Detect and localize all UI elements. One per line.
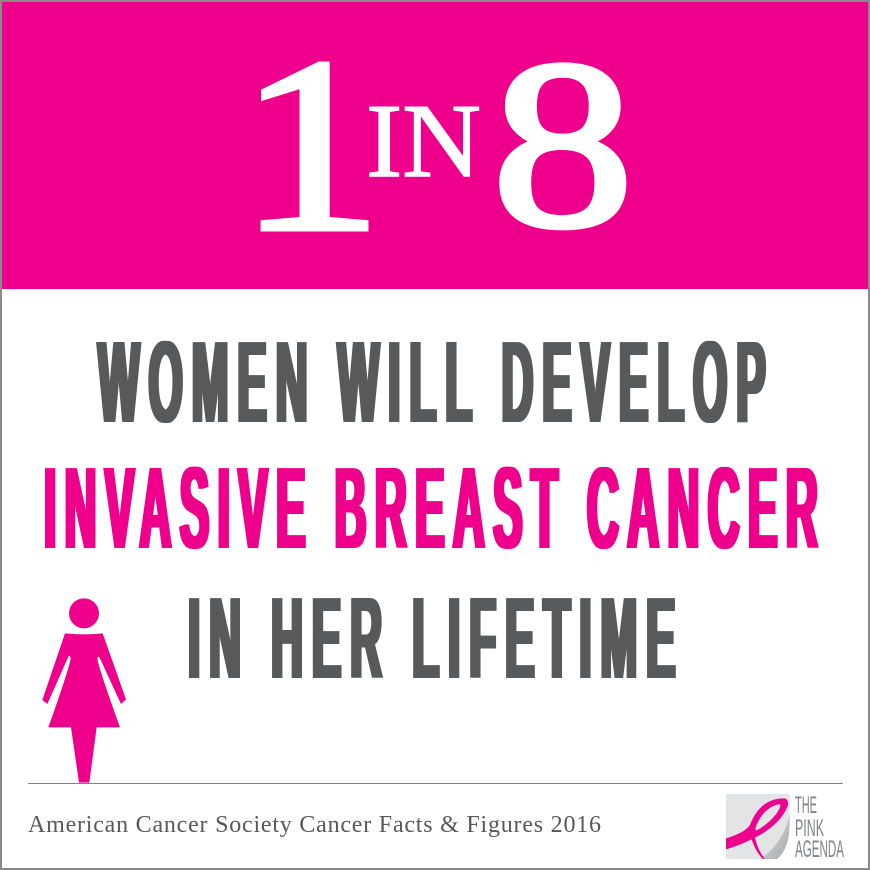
baseline rule (28, 783, 843, 784)
numeral 1: 1 (238, 6, 383, 283)
source citation: American Cancer Society Cancer Facts & Figures 2016 (28, 812, 601, 838)
logo page curl (760, 815, 790, 859)
heading: 1 in 8 (238, 6, 634, 283)
logo ribbon (726, 798, 788, 859)
logo text: PINK (795, 815, 824, 842)
line: invasive breast cancer: INVASIVE BREAST CANCER (44, 444, 818, 573)
line: women will develop: WOMEN WILL DEVELOP (98, 318, 766, 447)
logo text (795, 792, 844, 863)
icon: woman figure (42, 598, 126, 783)
numeral 8: 8 (492, 11, 634, 277)
word IN: IN (366, 82, 481, 199)
line: in her lifetime: IN HER LIFETIME (188, 574, 676, 703)
logo: the pink agenda (726, 792, 844, 863)
logo text: THE (795, 792, 817, 819)
logo tile (726, 794, 790, 859)
panel: pink header band (0, 0, 870, 289)
headline text (44, 318, 818, 703)
